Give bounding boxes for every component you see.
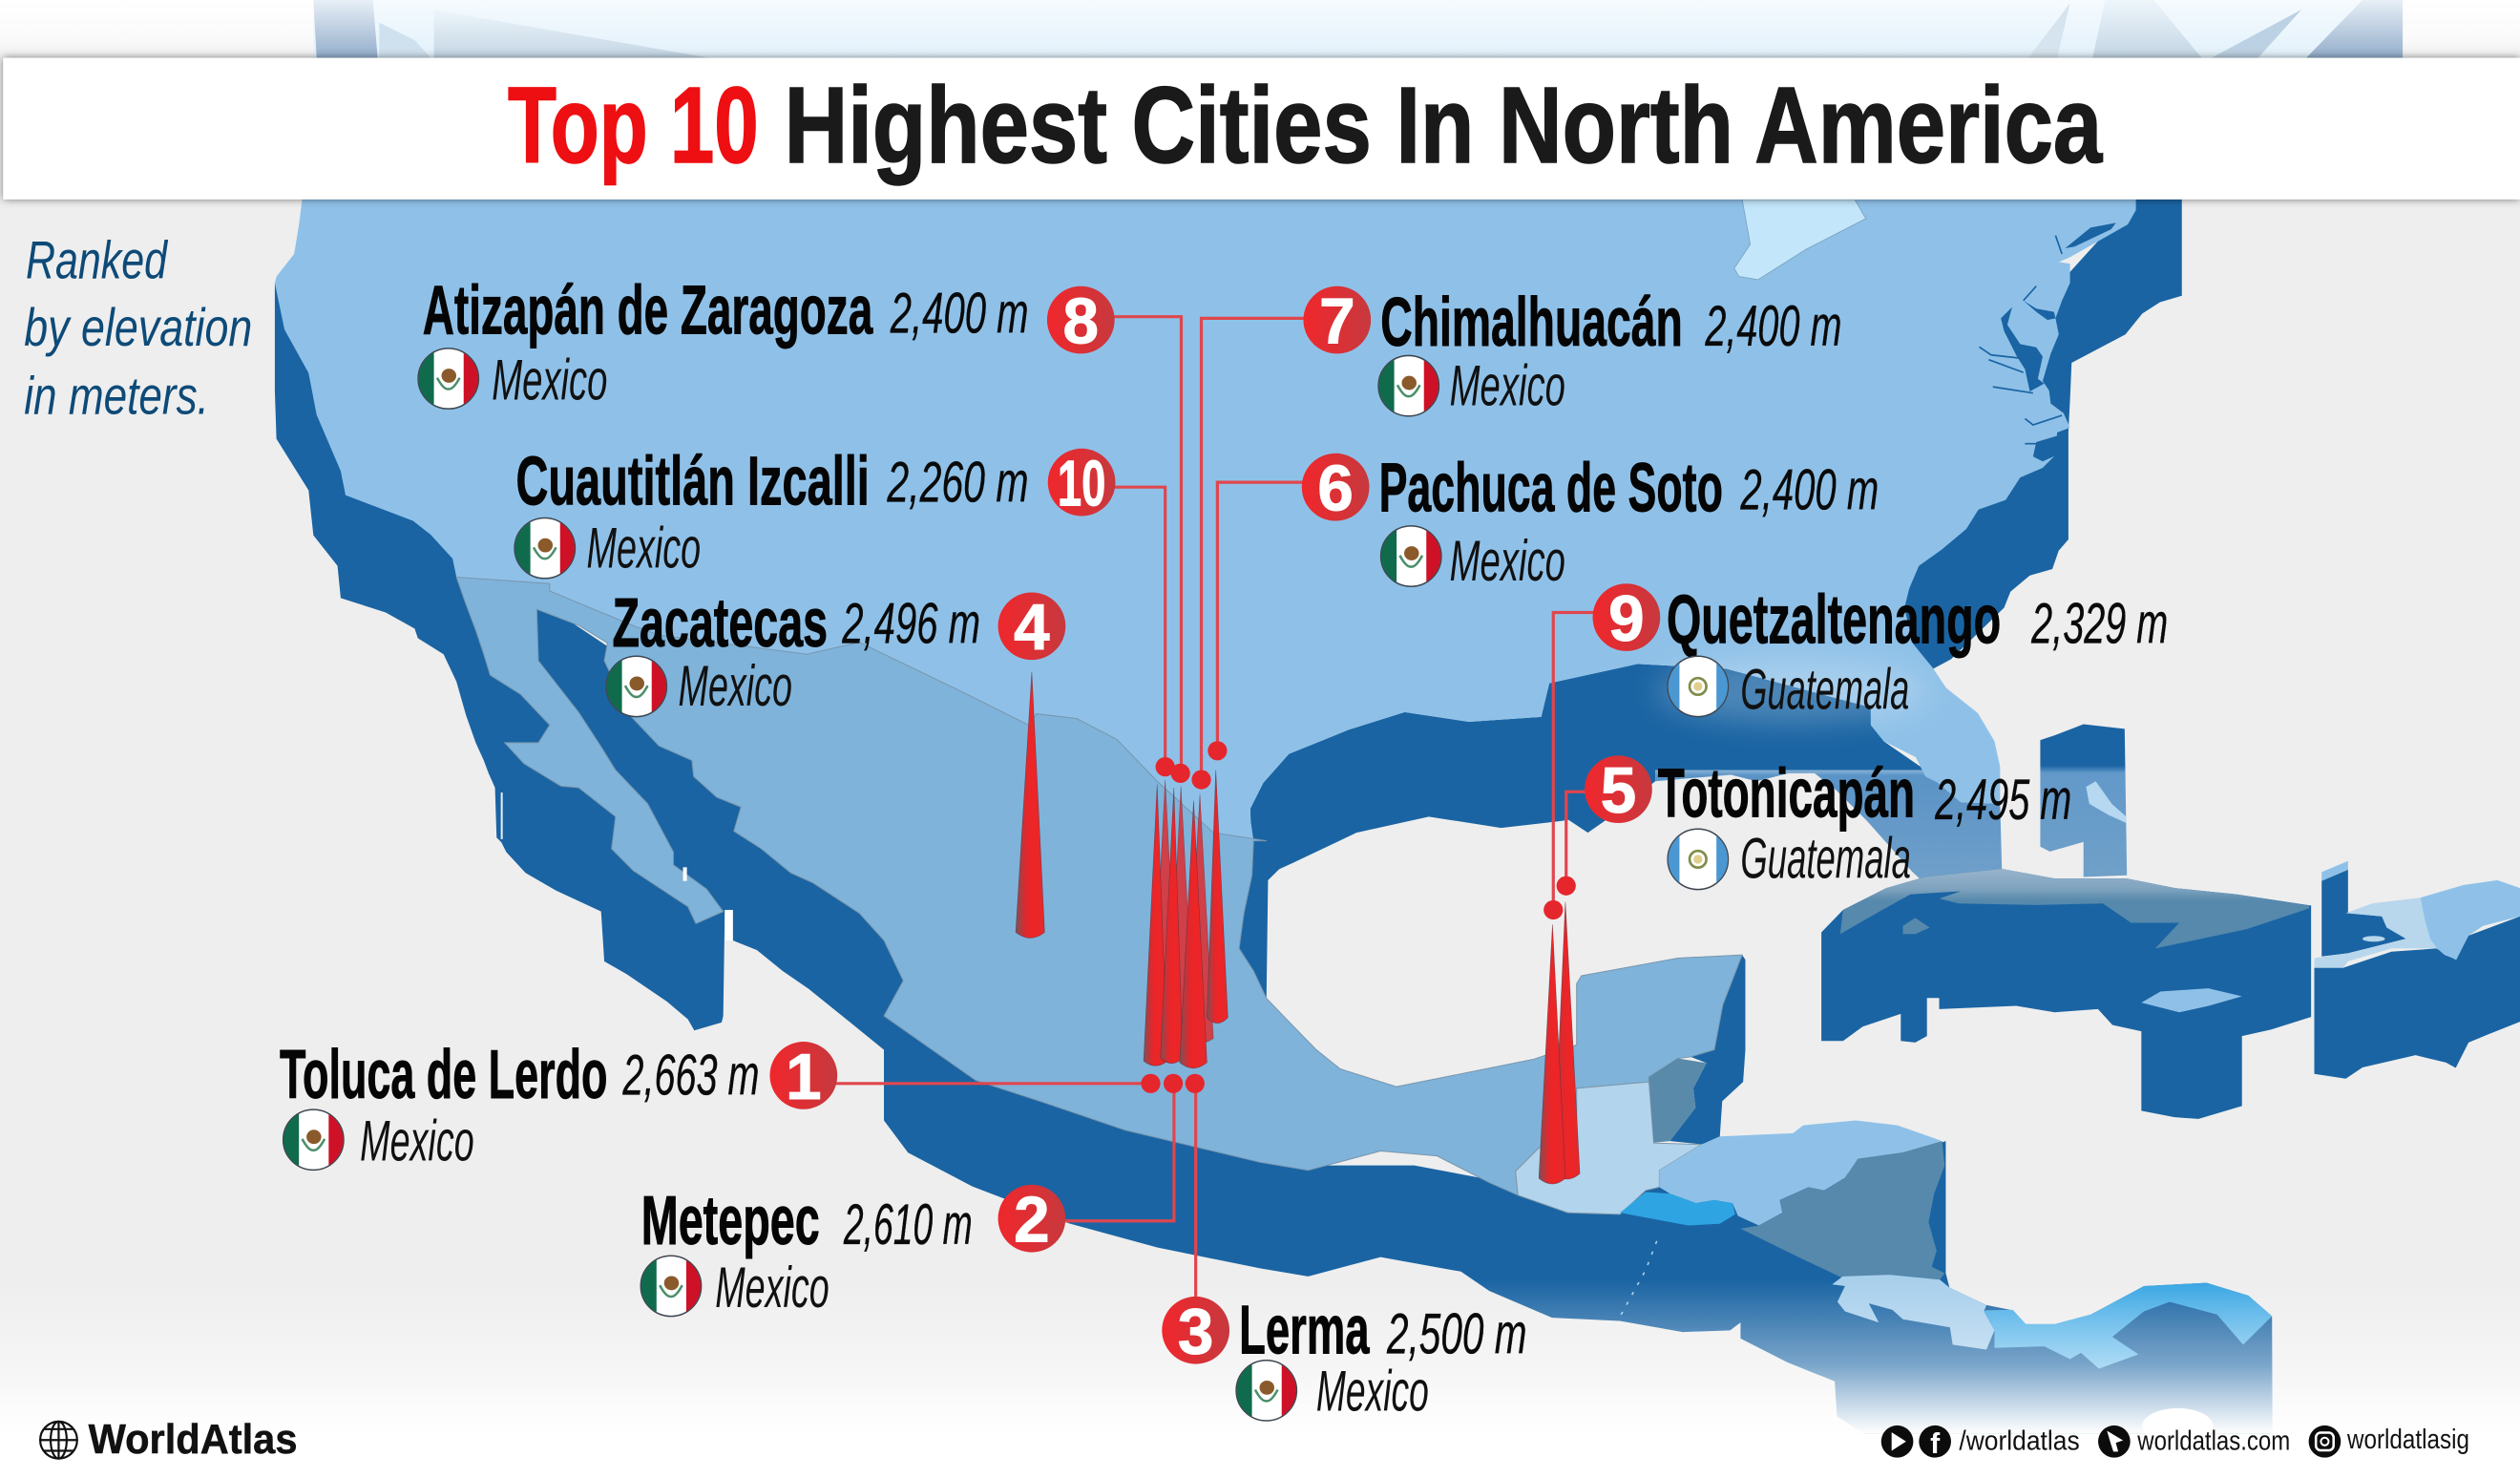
top map strip xyxy=(0,0,2520,58)
deep extrusion band: Gulf coast xyxy=(1239,664,1925,999)
Cuba land xyxy=(1840,869,2309,948)
Yucatan extrusion xyxy=(1670,955,1745,1144)
label: Quetzaltenango, rank 9: Guatemala xyxy=(1740,657,1909,722)
label: Atizapan de Zaragoza, rank 8 xyxy=(418,271,1115,412)
Panama land xyxy=(1984,1283,2272,1368)
label: Toluca de Lerdo, rank 1: Toluca de Lerdo xyxy=(280,1036,607,1113)
title: Highest Cities In North America xyxy=(785,65,2103,185)
label: Cuautitlan Izcalli, rank 10: Mexico xyxy=(587,515,701,580)
Cuba extrusion xyxy=(1821,869,2311,1043)
label: Toluca de Lerdo, rank 1: Mexico xyxy=(360,1108,474,1173)
label: Totonicapan, rank 5 xyxy=(1585,754,2071,890)
label: Metepec, rank 2 xyxy=(640,1182,1065,1320)
label: Atizapan de Zaragoza, rank 8: 8 xyxy=(1063,285,1099,357)
Hispaniola column extrusion xyxy=(2321,870,2405,957)
Atlantic inlets xyxy=(1979,222,2116,461)
label: Chimalhuacan, rank 7 xyxy=(1303,284,1841,417)
label: Pachuca de Soto, rank 6 xyxy=(1302,449,1879,593)
Guatemala land xyxy=(1516,1082,1701,1214)
Belize land xyxy=(1648,1059,1707,1143)
label: Lerma, rank 3: Lerma xyxy=(1239,1292,1370,1369)
bottom white fade xyxy=(0,1279,2520,1434)
Pacific dashed trench line xyxy=(1620,1241,1657,1317)
deep extrusion band: Atlantic coast xyxy=(1880,200,2182,668)
label: Chimalhuacan, rank 7: 7 xyxy=(1319,285,1355,357)
social links: worldatlas.com xyxy=(2136,1426,2290,1457)
Costa Rica land xyxy=(1832,1275,1994,1349)
social links: worldatlasig xyxy=(2346,1425,2469,1455)
label: Pachuca de Soto, rank 6: Mexico xyxy=(1450,528,1565,593)
label: Metepec, rank 2: 2 xyxy=(1014,1185,1050,1256)
elevation spikes xyxy=(1016,672,1580,1184)
El Salvador land xyxy=(1620,1192,1735,1225)
Dominican Republic land xyxy=(2421,880,2520,960)
label: Zacatecas, rank 4: 2,496 m xyxy=(842,590,980,655)
label: Pachuca de Soto, rank 6: Pachuca de Soto xyxy=(1379,449,1723,526)
label: Zacatecas, rank 4: 4 xyxy=(1014,592,1050,664)
WorldAtlas logo: WorldAtlas xyxy=(89,1416,297,1463)
label: Totonicapan, rank 5: 5 xyxy=(1601,755,1636,827)
label: Zacatecas, rank 4: Mexico xyxy=(679,653,792,718)
Mexico land xyxy=(456,577,1742,1195)
subtitle note: in meters. xyxy=(24,367,209,426)
label: Atizapan de Zaragoza, rank 8: Atizapán de Zaragoza xyxy=(423,271,873,348)
deep extrusion band: west and south coast xyxy=(275,283,2273,1434)
label: Toluca de Lerdo, rank 1: 1 xyxy=(786,1042,822,1113)
Honduras land xyxy=(1659,1121,1942,1225)
label: Pachuca de Soto, rank 6: 2,400 m xyxy=(1740,457,1879,522)
title: Top 10 xyxy=(508,65,759,185)
label: Atizapan de Zaragoza, rank 8: Mexico xyxy=(492,347,607,412)
label: Atizapan de Zaragoza, rank 8: 2,400 m xyxy=(890,281,1029,346)
label: Metepec, rank 2: 2,610 m xyxy=(843,1192,973,1256)
label: Lerma, rank 3: Mexico xyxy=(1316,1358,1429,1423)
Bahamas extrusion xyxy=(2040,725,2127,876)
subtitle note xyxy=(24,230,252,426)
leader lines and markers xyxy=(836,317,1594,1299)
label: Zacatecas, rank 4 xyxy=(606,584,1065,718)
label: Cuautitlan Izcalli, rank 10: 2,260 m xyxy=(887,449,1029,514)
subtitle note: Ranked xyxy=(26,230,169,289)
label: Toluca de Lerdo, rank 1 xyxy=(280,1036,837,1173)
United States and Canada land xyxy=(275,200,2136,841)
Jamaica extrusion xyxy=(2141,1024,2242,1119)
label: Lerma, rank 3: 3 xyxy=(1178,1297,1213,1368)
label: Chimalhuacan, rank 7: Mexico xyxy=(1450,352,1565,417)
Hispaniola extrusion xyxy=(2314,917,2520,1079)
label: Metepec, rank 2: Metepec xyxy=(641,1182,820,1259)
label: Quetzaltenango, rank 9: Quetzaltenango xyxy=(1667,581,2001,658)
Isle of Youth xyxy=(1902,918,1930,934)
white slivers on the extrusion xyxy=(724,910,733,940)
label: Cuautitlan Izcalli, rank 10 xyxy=(514,443,1115,580)
title xyxy=(508,65,2103,185)
social links: /worldatlas xyxy=(1959,1426,2080,1457)
Hudson Bay xyxy=(1734,200,1866,280)
map of North America xyxy=(275,200,2520,1434)
subtitle note: by elevation xyxy=(24,298,252,357)
Florida extrusion xyxy=(1655,770,2002,881)
label: Cuautitlan Izcalli, rank 10: 10 xyxy=(1058,449,1105,520)
label: Quetzaltenango, rank 9: 2,329 m xyxy=(2031,590,2168,655)
label: Totonicapan, rank 5: Totonicapán xyxy=(1658,754,1915,832)
Haiti land xyxy=(2314,897,2437,968)
label: Lerma, rank 3 xyxy=(1162,1292,1526,1423)
label: Zacatecas, rank 4: Zacatecas xyxy=(612,584,828,662)
label: Cuautitlan Izcalli, rank 10: Cuautitlán Izcalli xyxy=(515,443,870,520)
label: Chimalhuacan, rank 7: 2,400 m xyxy=(1705,293,1841,358)
Jamaica land xyxy=(2141,988,2242,1012)
social links: f xyxy=(1930,1428,1941,1460)
label: Pachuca de Soto, rank 6: 6 xyxy=(1317,454,1354,525)
Nicaragua land xyxy=(1740,1141,1944,1279)
title bar xyxy=(3,58,2520,200)
label: Quetzaltenango, rank 9 xyxy=(1593,581,2168,722)
label: Lerma, rank 3: 2,500 m xyxy=(1386,1301,1526,1366)
label: Totonicapan, rank 5: 2,495 m xyxy=(1934,767,2071,832)
label: Metepec, rank 2: Mexico xyxy=(715,1255,830,1320)
glow behind Quetzaltenango country label xyxy=(1655,659,1928,724)
label: Totonicapan, rank 5: Guatemala xyxy=(1740,825,1911,890)
label: Quetzaltenango, rank 9: 9 xyxy=(1608,583,1645,655)
label: Chimalhuacan, rank 7: Chimalhuacán xyxy=(1380,284,1683,361)
social links xyxy=(1881,1425,2469,1460)
label: Toluca de Lerdo, rank 1: 2,663 m xyxy=(622,1043,760,1108)
